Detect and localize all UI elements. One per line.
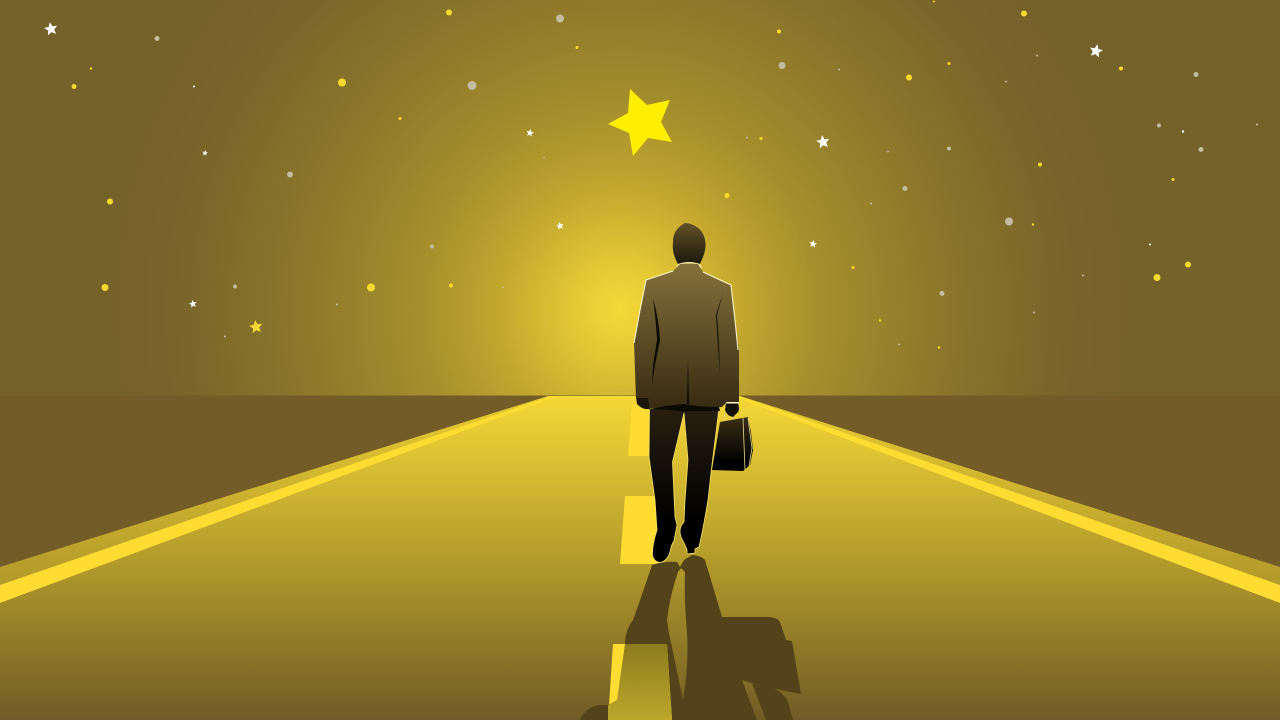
jacket hem shadow [650, 404, 720, 411]
man's shadow on road [580, 555, 801, 720]
road centre dashes [620, 405, 660, 564]
small white stars [43, 21, 1104, 308]
businessman figure [634, 223, 753, 563]
ground: dark horizon band [0, 396, 1280, 720]
yellow dots [72, 0, 1191, 349]
jacket rim light [634, 271, 738, 350]
head [673, 223, 706, 264]
left hand [636, 397, 650, 409]
third road dash under shadow [608, 644, 672, 720]
right hand [725, 403, 739, 417]
jacket creases [652, 293, 723, 404]
large yellow star [608, 89, 672, 156]
background: glowing sky [0, 0, 1280, 396]
grey dots [154, 14, 1258, 346]
legs and shoes [649, 408, 719, 563]
cuff [726, 402, 739, 404]
jacket [634, 264, 739, 409]
briefcase [712, 411, 753, 471]
shirt collar [676, 262, 702, 268]
small yellow star [248, 319, 263, 334]
road: shoulders, edge lines and surface [0, 396, 1280, 720]
